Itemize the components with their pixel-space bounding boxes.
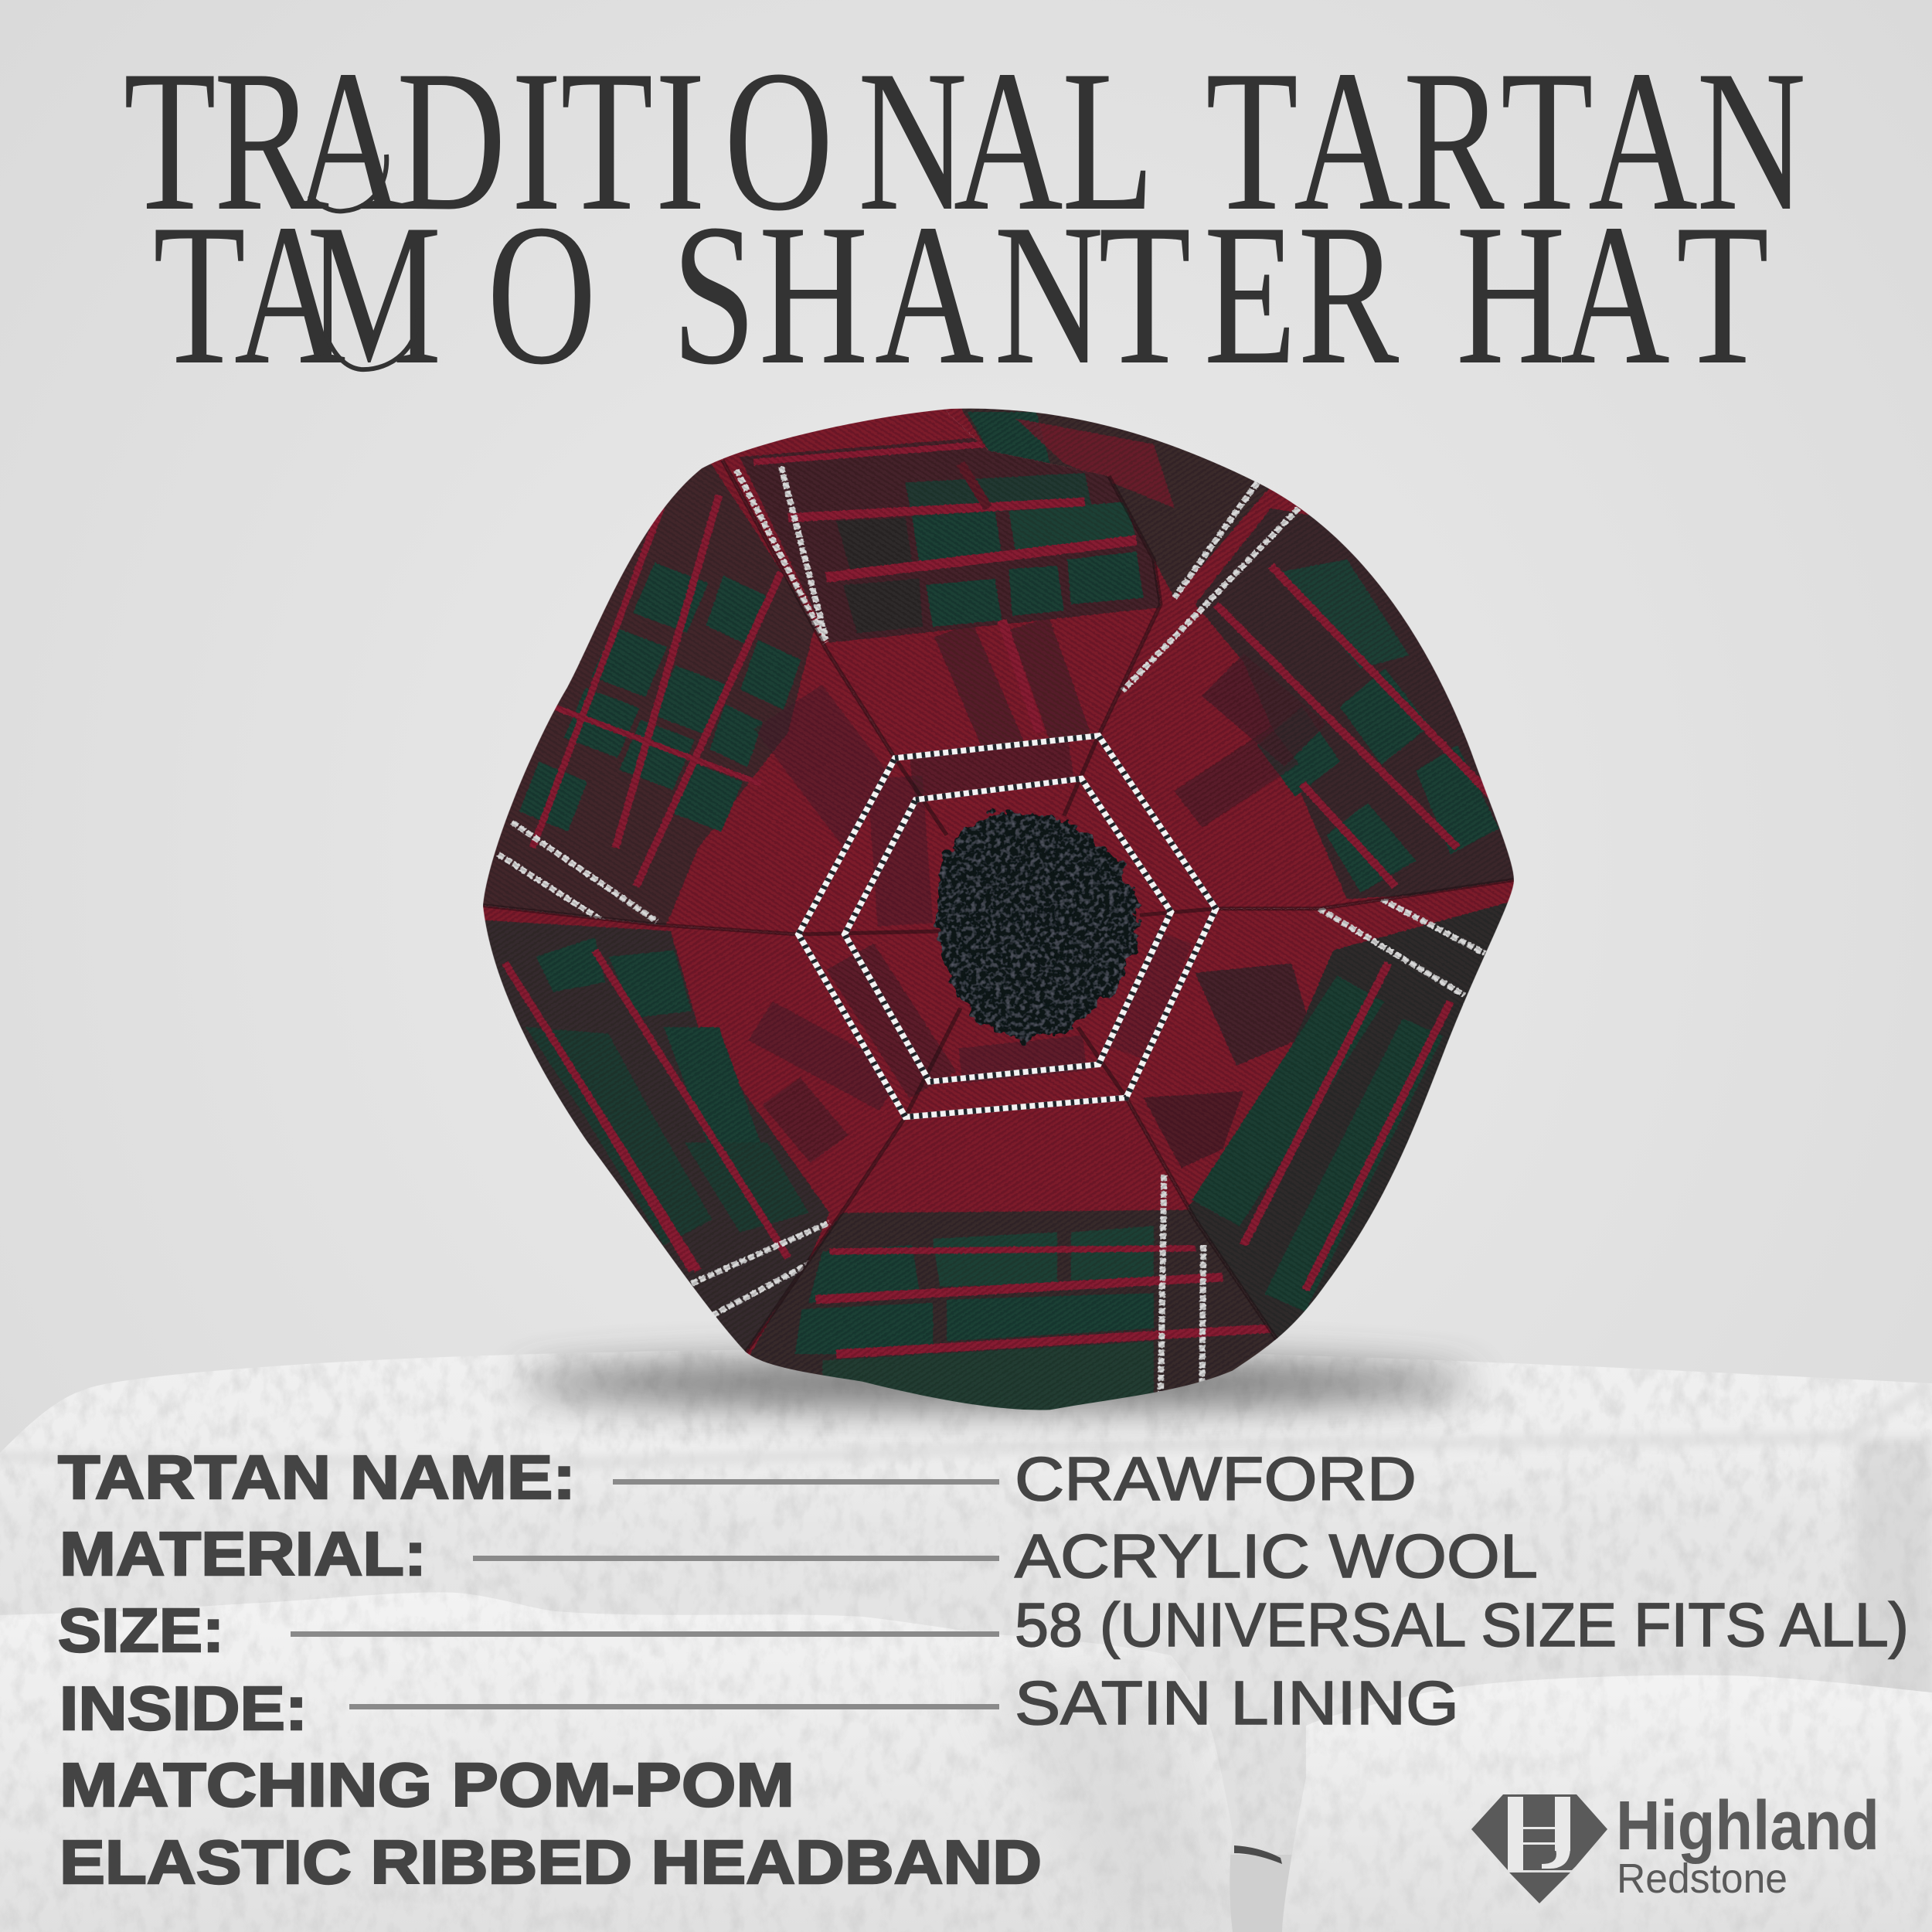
panel: lower left	[483, 905, 903, 1352]
spec row: inside	[60, 1668, 1459, 1743]
logo	[1471, 1787, 1879, 1903]
title	[124, 29, 1806, 407]
title line 2: TAM O SHANTER HAT	[153, 183, 1769, 407]
logo wordmark: Highland	[1616, 1787, 1879, 1865]
rock platform: front left block	[0, 1592, 1236, 1932]
title line 1: TRADITIONAL TARTAN	[124, 29, 1806, 253]
spec row: tartan name	[58, 1443, 1417, 1513]
crevice shadow	[1234, 1845, 1282, 1864]
panel: upper right	[947, 408, 1514, 909]
spec row: material	[60, 1519, 1538, 1590]
spec row: tartan name: CRAWFORD	[1015, 1444, 1417, 1513]
hat body	[483, 408, 1514, 1410]
icon: logo diamond	[1471, 1794, 1607, 1903]
spec row: size	[58, 1590, 1909, 1665]
rock platform: back slab	[0, 1345, 1932, 1870]
floor gap	[1206, 1839, 1314, 1932]
panel: centre crown	[788, 726, 1230, 1130]
panel: bottom	[747, 1100, 1277, 1410]
panel: top	[722, 409, 1161, 756]
feature: matching pom-pom: MATCHING POM-POM	[60, 1750, 794, 1819]
spec row: material: MATERIAL:	[60, 1519, 427, 1588]
panel: lower right	[1128, 879, 1514, 1339]
panel: upper left	[395, 373, 905, 944]
pom-pom	[937, 813, 1138, 1039]
shadow under hat	[518, 1360, 1476, 1406]
feature: elastic ribbed headband: ELASTIC RIBBED HEADBAND	[60, 1828, 1042, 1896]
title swash: R into A	[309, 155, 386, 211]
spec row: size: SIZE:	[58, 1596, 224, 1665]
spec row: material: ACRYLIC WOOL	[1015, 1522, 1538, 1590]
spec row: size: 58 (UNIVERSAL SIZE FITS ALL)	[1015, 1590, 1909, 1659]
spec row: inside: SATIN LINING	[1015, 1668, 1459, 1737]
tartan tam o shanter hat	[483, 408, 1514, 1410]
spec row: tartan name: TARTAN NAME:	[58, 1443, 576, 1512]
rock platform: front right block	[1275, 1673, 1932, 1932]
hexagon stripe inner	[845, 778, 1171, 1082]
seam folds	[483, 460, 1514, 1352]
spec row: inside: INSIDE:	[60, 1674, 308, 1743]
logo sub-wordmark: Redstone	[1617, 1855, 1787, 1902]
title swash: M tail	[325, 309, 418, 369]
hexagon stripe outer	[798, 736, 1216, 1117]
